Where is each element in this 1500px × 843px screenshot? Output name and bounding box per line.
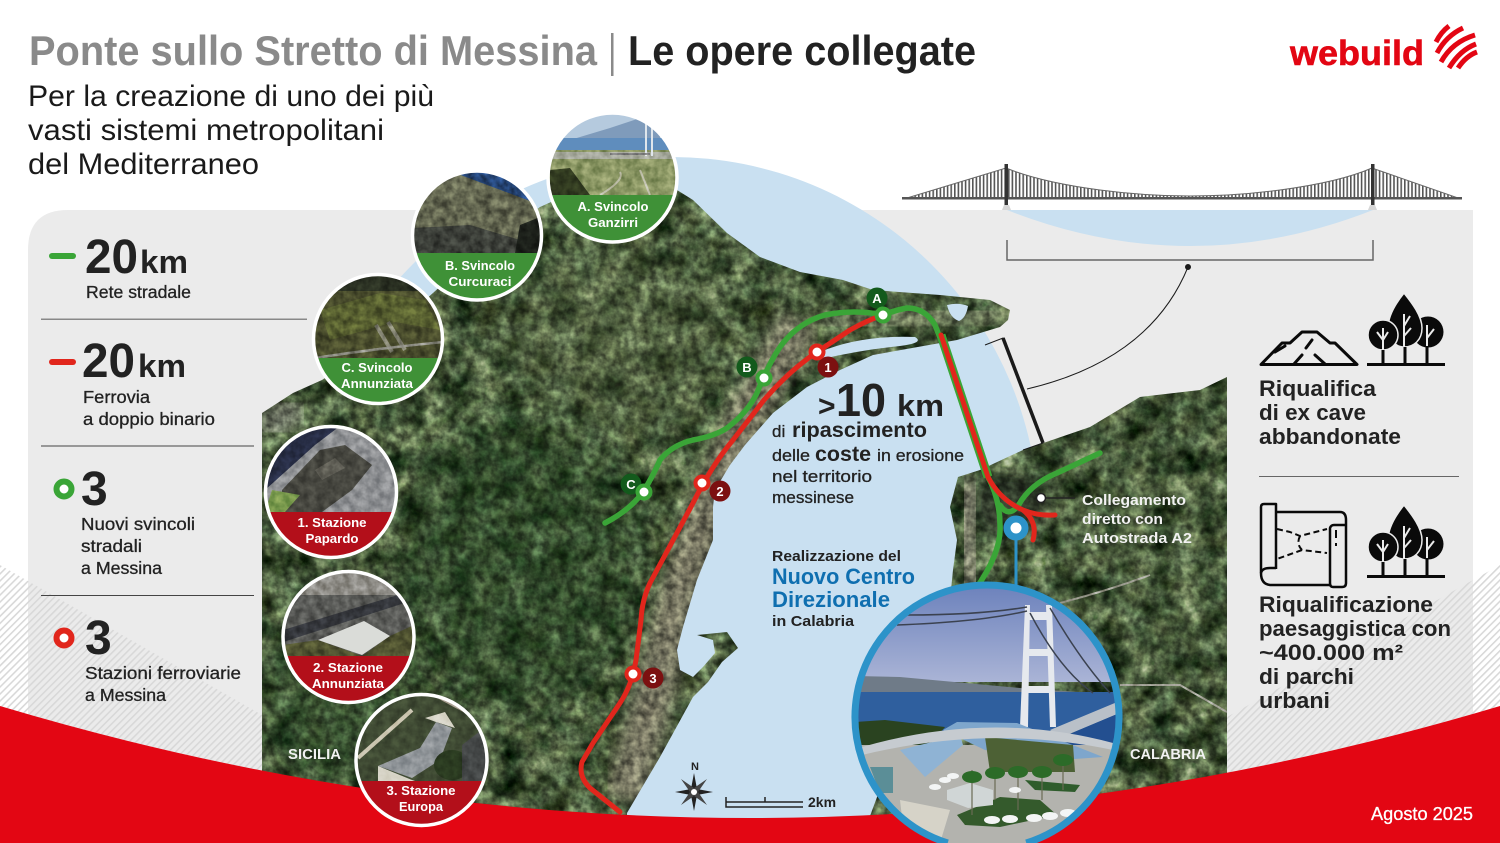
icon: quarry mountain	[1261, 332, 1357, 364]
text: coastal nourishment: di	[772, 422, 785, 441]
compass rose: N	[691, 761, 699, 773]
text: landscape requalification: di parchi	[1259, 664, 1354, 689]
webuild logo	[1289, 26, 1477, 73]
legend: railway	[52, 335, 215, 429]
legend: junctions: 3	[81, 463, 108, 516]
marker: junction C	[620, 474, 650, 498]
text: Nuovo Centro Direzionale: Nuovo Centro	[772, 564, 915, 589]
map: lagoons	[820, 304, 968, 359]
legend: road network	[52, 231, 191, 302]
bridge elevation	[902, 164, 1462, 210]
scale bar	[726, 794, 836, 810]
coast bracket and leader	[985, 264, 1190, 450]
compass rose	[675, 761, 713, 811]
legend: railway: 20	[82, 335, 135, 388]
legend: junctions: stradali	[81, 536, 142, 556]
text: landscape requalification: paesaggistica con	[1259, 616, 1451, 641]
grey content panel	[28, 210, 1473, 843]
scale bar: 2km	[808, 794, 836, 810]
text: coastal nourishment: delle	[772, 446, 810, 465]
map: Sicily land	[262, 190, 1010, 815]
text: landscape requalification: urbani	[1259, 688, 1330, 713]
callout: Autostrada A2 connection: diretto con	[1082, 511, 1163, 528]
photo circle B: Svincolo Curcuraci	[412, 171, 545, 303]
divider	[1259, 476, 1459, 477]
callout: Autostrada A2 connection	[1036, 492, 1192, 547]
photo circle 1: Stazione Papardo: Papardo	[306, 531, 359, 546]
callout: Autostrada A2 connection: Collegamento	[1082, 492, 1186, 509]
photo circle: Nuovo Centro Direzionale	[852, 582, 1125, 843]
photo circle A: Svincolo Ganzirri: Ganzirri	[588, 215, 638, 230]
photo circle 1: Stazione Papardo	[265, 426, 399, 562]
subtitle	[28, 80, 434, 181]
date: Agosto 2025	[1371, 804, 1473, 824]
text: quarry requalification: Riqualifica	[1259, 376, 1377, 401]
text: coastal nourishment: >	[818, 390, 836, 423]
photo circle 2: Stazione Annunziata: 2. Stazione	[313, 660, 383, 675]
legend: junctions: a Messina	[81, 558, 162, 578]
legend: railway: Ferrovia	[83, 387, 150, 407]
text: coastal nourishment: nel territorio	[772, 467, 872, 486]
legend: stations	[56, 612, 241, 705]
divider	[41, 446, 254, 447]
title	[29, 27, 976, 76]
photo circle 2: Stazione Annunziata	[283, 571, 415, 706]
legend: railway: km	[138, 348, 186, 384]
bridge span bracket	[1007, 240, 1373, 260]
pin: Nuovo Centro Direzionale	[1007, 519, 1025, 586]
sea under the bridge	[1007, 210, 1373, 246]
legend: road network: km	[140, 244, 188, 280]
photo circle 1: Stazione Papardo: 1. Stazione	[298, 515, 366, 530]
marker: station 2	[696, 476, 730, 502]
label: Calabria: CALABRIA	[1130, 747, 1207, 763]
webuild logo: webuild	[1289, 34, 1424, 73]
divider	[41, 595, 254, 596]
hatched band left	[0, 565, 262, 790]
legend: railway: a doppio binario	[83, 409, 215, 429]
text: Nuovo Centro Direzionale: in Calabria	[772, 613, 855, 630]
photo circle C: Svincolo Annunziata: Annunziata	[341, 376, 414, 391]
marker: station 3	[626, 668, 664, 688]
photo circle 2: Stazione Annunziata: Annunziata	[312, 676, 385, 691]
text: coastal nourishment: coste	[815, 443, 871, 466]
text: Nuovo Centro Direzionale	[772, 548, 915, 630]
text: quarry requalification: abbandonate	[1259, 424, 1401, 449]
icon: landscape map	[1261, 504, 1346, 587]
hatched band right	[1227, 565, 1500, 790]
text: Nuovo Centro Direzionale: Realizzazione del	[772, 548, 901, 565]
marker: junction C: C	[626, 477, 636, 492]
subtitle: vasti sistemi metropolitani	[28, 114, 384, 147]
text: Nuovo Centro Direzionale: Direzionale	[772, 587, 890, 612]
text: landscape requalification: Riqualificazione	[1259, 592, 1433, 617]
text: coastal nourishment: messinese	[772, 488, 854, 507]
text: quarry requalification: di ex cave	[1259, 400, 1366, 425]
text: coastal nourishment: ripascimento	[792, 419, 927, 442]
photo circle 3: Stazione Europa: 3. Stazione	[386, 783, 456, 798]
title: Ponte sullo Stretto di Messina	[29, 27, 598, 74]
title: Le opere collegate	[628, 27, 976, 74]
subtitle: Per la creazione di uno dei più	[28, 80, 434, 113]
text: coastal nourishment	[772, 374, 964, 507]
marker: station 1: 1	[824, 360, 832, 375]
marker: station 3: 3	[649, 671, 657, 686]
label: Sicilia: SICILIA	[288, 747, 342, 763]
legend: stations: 3	[85, 612, 112, 665]
photo circle B: Svincolo Curcuraci: Curcuraci	[448, 274, 512, 289]
photo circle 3: Stazione Europa: Europa	[399, 799, 444, 814]
text: quarry requalification	[1259, 376, 1401, 449]
text: landscape requalification: ~400.000 m²	[1259, 640, 1403, 665]
text: landscape requalification	[1259, 592, 1451, 713]
legend: junctions: Nuovi svincoli	[81, 514, 195, 534]
subtitle: del Mediterraneo	[28, 148, 259, 181]
marker: junction A: A	[872, 291, 882, 306]
photo circle A: Svincolo Ganzirri: A. Svincolo	[578, 199, 649, 214]
text: coastal nourishment: 10	[836, 374, 886, 426]
photo circle A: Svincolo Ganzirri	[548, 113, 678, 245]
sea circle	[305, 157, 1039, 843]
legend: stations: a Messina	[85, 685, 166, 705]
marker: station 1	[810, 346, 838, 378]
marker: junction B	[736, 356, 770, 384]
callout: Autostrada A2 connection: Autostrada A2	[1082, 530, 1192, 547]
marker: junction A	[866, 288, 890, 322]
text: coastal nourishment: km	[897, 388, 944, 423]
red bottom band	[0, 706, 1500, 843]
marker: station 2: 2	[716, 484, 724, 499]
legend: road network: Rete stradale	[86, 282, 191, 302]
divider	[41, 318, 307, 320]
icon: trees	[1367, 293, 1445, 365]
legend: road network: 20	[85, 231, 138, 284]
photo circle C: Svincolo Annunziata: C. Svincolo	[342, 360, 413, 375]
text: coastal nourishment: in erosione	[877, 446, 964, 465]
photo circle B: Svincolo Curcuraci: B. Svincolo	[445, 258, 515, 273]
photo circle 3: Stazione Europa	[356, 694, 488, 831]
road network: green	[605, 308, 1100, 590]
map: Calabria land	[870, 377, 1227, 816]
legend: stations: Stazioni ferroviarie	[85, 663, 241, 683]
railway: red	[581, 315, 1055, 812]
legend: junctions	[56, 463, 195, 578]
photo circle C: Svincolo Annunziata	[313, 273, 443, 408]
marker: junction B: B	[742, 360, 752, 375]
icon: trees	[1367, 505, 1445, 577]
